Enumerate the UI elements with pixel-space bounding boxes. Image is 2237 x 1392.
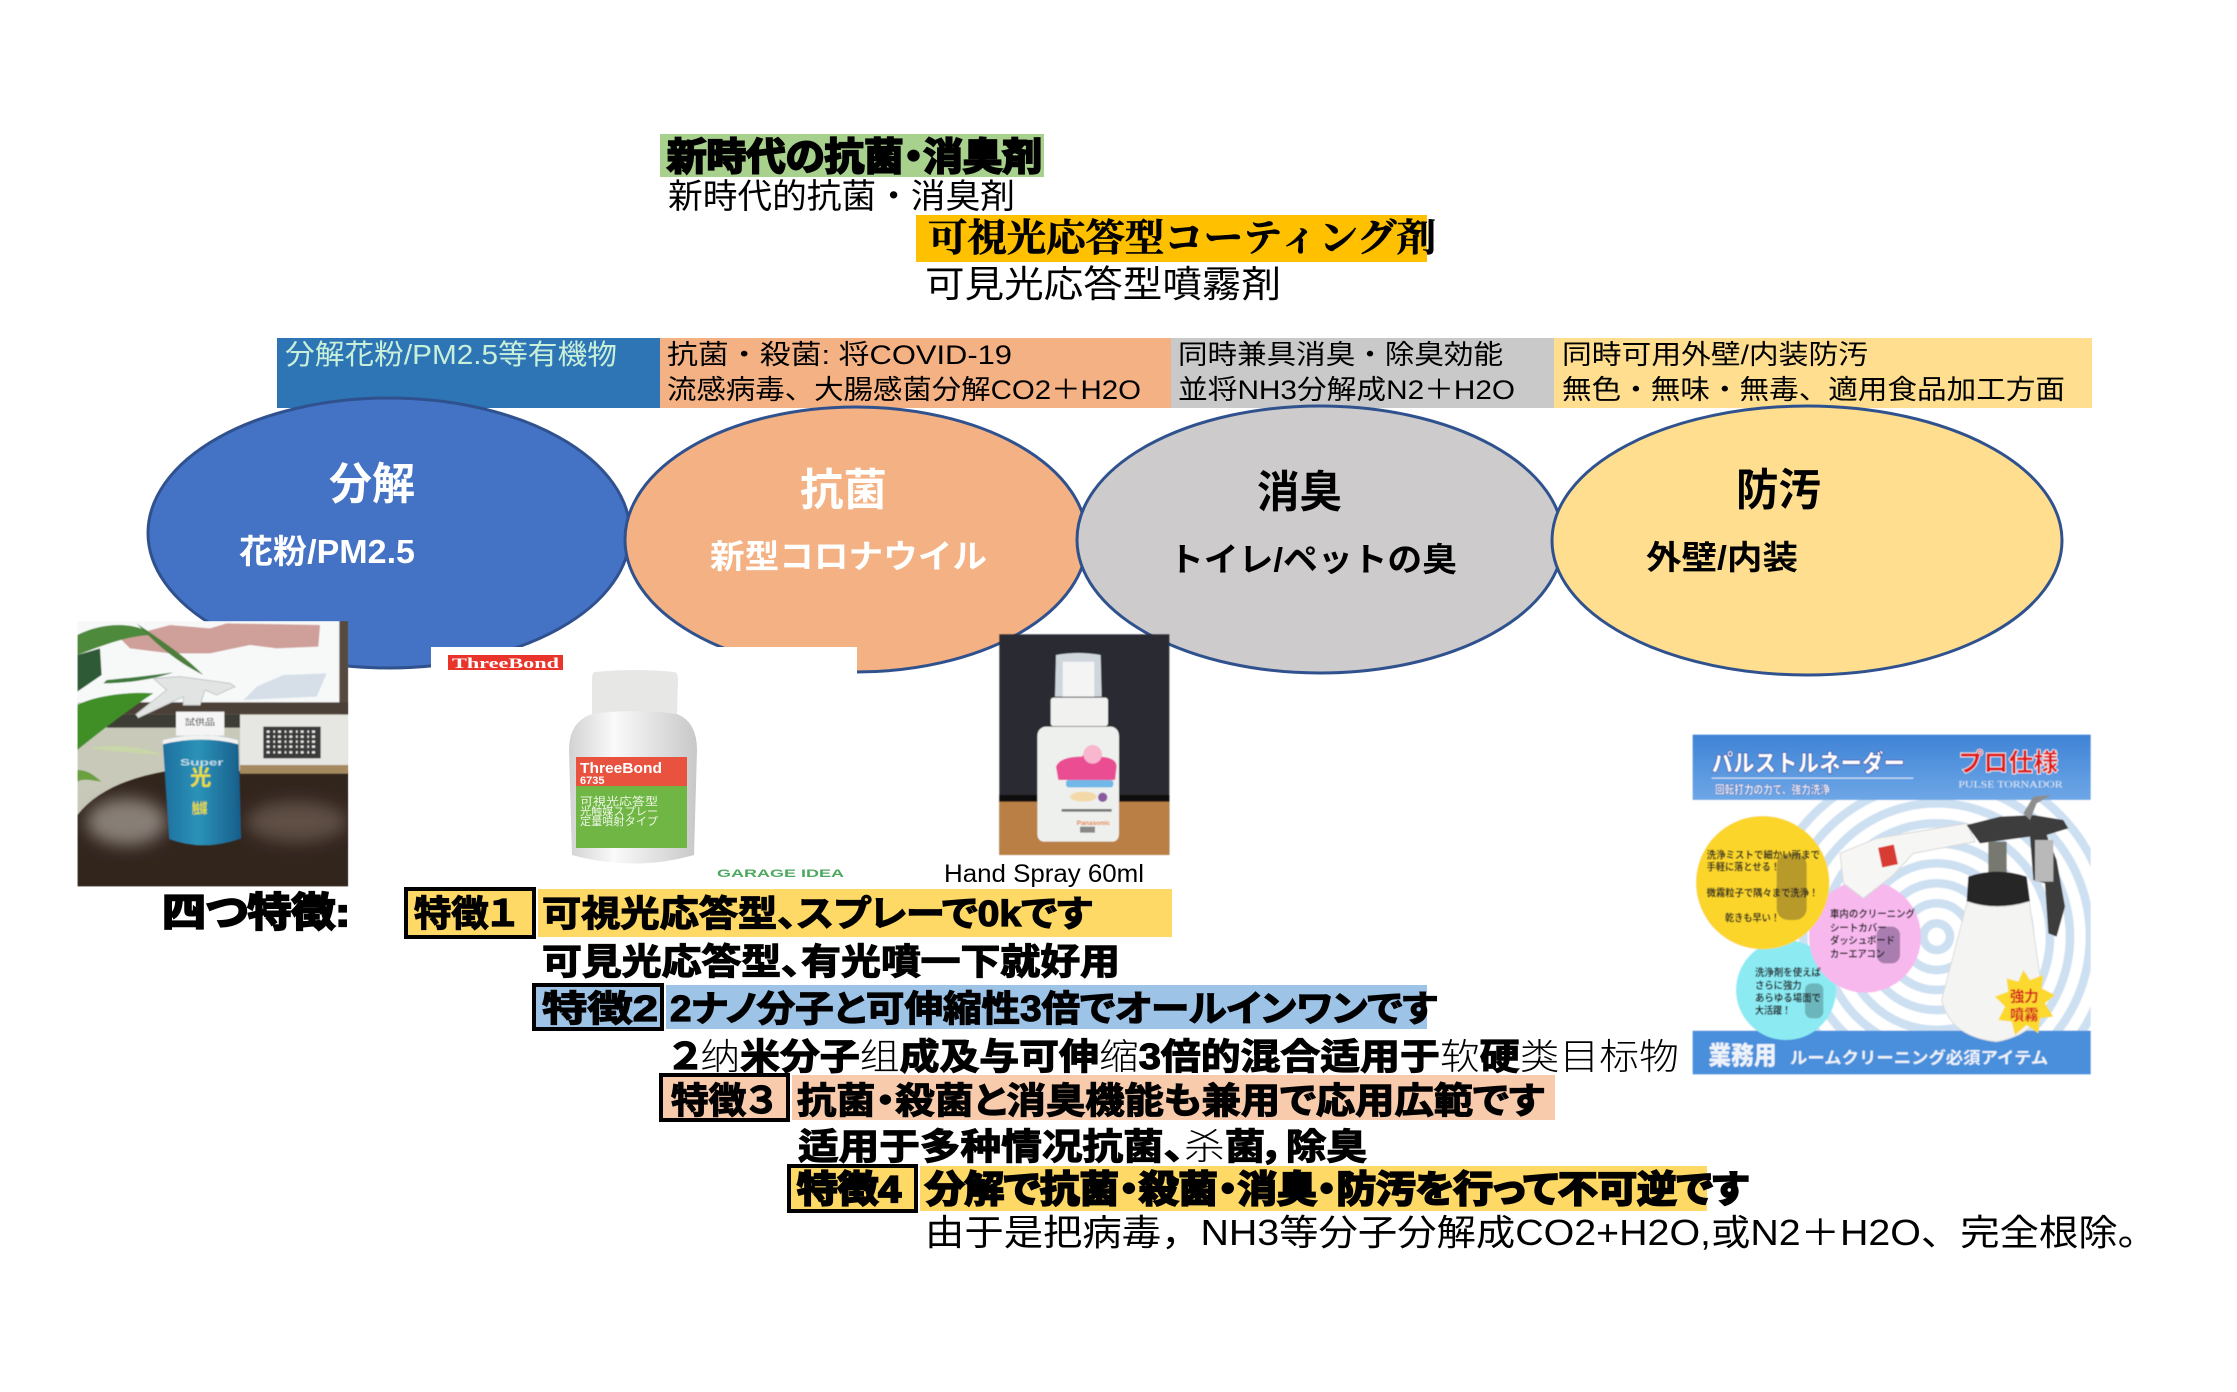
panel: antibacterial description strip: 抗菌・殺菌: 将COVID-19 xyxy=(667,340,1012,370)
circle text: ダッシュボード xyxy=(1830,934,1895,947)
feature 2: 特徴2 xyxy=(542,988,658,1029)
circle text: あらゆる場面で xyxy=(1755,993,1821,1005)
ellipse: antifouling xyxy=(1552,406,2062,675)
panel: decomposition description strip: 分解花粉/PM2.5等有機物 xyxy=(285,339,617,370)
concentric rings background xyxy=(1798,799,2091,1032)
panel: antibacterial description strip: 流感病毒、大腸感菌分解CO2＋H2O xyxy=(667,375,1141,405)
circle text: シートカバー xyxy=(1830,923,1887,935)
feature 1 xyxy=(406,889,1172,937)
circle text: 微霧粒子で隅々まで洗浄！ xyxy=(1707,887,1818,900)
ellipse: decomposition: 花粉/PM2.5 xyxy=(239,533,415,570)
panel: antifouling description strip: 同時可用外壁/内装防汚 xyxy=(1562,340,1868,370)
feature 2: 2ナノ分子と可伸縮性3倍でオールインワンです xyxy=(670,988,1437,1029)
panel: antifouling description strip: 無色・無味・無毒、適用食品加工方面 xyxy=(1562,375,2065,405)
feature 1: 可視光応答型、スプレーで0kです xyxy=(542,893,1092,934)
icon: ThreeBond spray can xyxy=(569,670,697,864)
photo: Pulse Tornador advert: プロ仕様 xyxy=(1958,750,2059,778)
panel: deodorant description strip: 同時兼具消臭・除臭効能 xyxy=(1178,340,1503,370)
photo: hand spray bottle xyxy=(999,634,1169,855)
ellipse: deodorant xyxy=(1077,406,1563,673)
ellipse: antibacterial: 新型コロナウイル xyxy=(710,538,987,575)
photo: Pulse Tornador advert: 強力 xyxy=(2010,989,2039,1006)
subtitle: Chinese title: 新時代的抗菌・消臭剤 xyxy=(668,178,1015,216)
circle text: 洗浄ミストで細かい所まで xyxy=(1707,848,1820,861)
circle text: カーエアコン xyxy=(1830,948,1885,960)
logo: ThreeBond xyxy=(448,655,563,672)
icon: ThreeBond spray can: 光触媒スプレー xyxy=(580,804,658,818)
ellipse: antibacterial: 抗菌 xyxy=(800,466,887,515)
ellipse: decomposition: 分解 xyxy=(329,460,415,509)
icon: ThreeBond spray can: 定量噴射タイプ xyxy=(580,814,658,828)
ellipse: antibacterial xyxy=(625,407,1087,672)
photo: Pulse Tornador advert: 噴霧 xyxy=(2010,1006,2039,1024)
caption: Hand Spray 60ml: Hand Spray 60ml xyxy=(944,860,1144,888)
circle text: さらに強力 xyxy=(1755,979,1802,992)
icon: ThreeBond spray can: ThreeBond xyxy=(580,760,662,777)
feature 3 xyxy=(661,1075,1555,1121)
photo: Pulse Tornador advert: 回転打力の力で、強力洗浄 xyxy=(1715,782,1831,796)
circle text: 手軽に落とせる！ xyxy=(1707,861,1780,874)
photo: Pulse Tornador advert xyxy=(1692,734,2092,1076)
feature 4 Chinese description: 由于是把病毒，NH3等分子分解成CO2+H2O,或N2＋H2O、完全根除。 xyxy=(925,1212,2157,1253)
circle text: 乾きも早い！ xyxy=(1725,912,1780,925)
feature 3 Chinese description: 适用于多种情况抗菌、 杀菌，除臭 xyxy=(798,1126,1367,1167)
circle text: 車内のクリーニング xyxy=(1830,907,1915,920)
subheading: visible-light spray: 可見光応答型噴霧剤 xyxy=(925,264,1281,305)
photo: Pulse Tornador advert: PULSE TORNADOR xyxy=(1958,780,2064,790)
photo: ThreeBond product on white background xyxy=(431,647,857,887)
feature 4: 分解で抗菌・殺菌・消臭・防汚を行って不可逆です xyxy=(925,1169,1748,1210)
icon: ThreeBond spray can: 6735 xyxy=(580,775,604,787)
panel: deodorant description strip: 並将NH3分解成N2＋H2O xyxy=(1178,375,1515,405)
photo: Pulse Tornador advert: ルームクリーニング必須アイテム xyxy=(1790,1047,2048,1067)
ellipse: deodorant: トイレ/ペットの臭 xyxy=(1169,541,1457,578)
photo: Super spray bottle on table: 触媒 xyxy=(192,800,207,816)
feature 3: 特徴３ xyxy=(671,1080,775,1121)
feature 1: 特徴１ xyxy=(414,893,517,934)
ellipse: decomposition xyxy=(148,398,630,668)
photo: hand spray bottle: Panasonic xyxy=(1077,820,1110,827)
panel: antibacterial description strip xyxy=(660,338,1171,408)
panel: antifouling description strip xyxy=(1554,338,2092,408)
photo: Super spray bottle on table xyxy=(77,621,348,887)
title: new-era antibacterial and deodorant: 新時代の抗菌・消臭剤 xyxy=(667,137,1042,179)
heading: visible-light coating agent: 可視光応答型コーティング剤 xyxy=(928,218,1436,260)
photo: Super spray bottle on table: 光 xyxy=(190,766,211,790)
ellipse: antifouling: 外壁/内装 xyxy=(1646,539,1798,576)
ellipse: antifouling: 防汚 xyxy=(1736,466,1821,515)
ellipse: deodorant: 消臭 xyxy=(1257,468,1342,517)
feature 2 Chinese description: ２纳米分子 组成及与可伸 缩3倍的混合适用于 软硬类目标物 xyxy=(670,1036,1679,1077)
label: GARAGE IDEA: GARAGE IDEA xyxy=(717,868,844,880)
badge star xyxy=(1995,970,2055,1035)
feature 4: 特徴4 xyxy=(797,1169,901,1210)
heading: four features: 四つ特徴: xyxy=(162,891,350,935)
circle text: 洗浄剤を使えば xyxy=(1755,966,1821,979)
icon: ThreeBond spray can: 可視光応答型 xyxy=(580,794,658,808)
photo: Super spray bottle on table: 試供品 xyxy=(185,716,215,727)
panel: decomposition description strip xyxy=(277,338,660,408)
logo: ThreeBond: ThreeBond xyxy=(452,656,560,672)
circle text xyxy=(1707,848,1915,1017)
banner text: パルストルネーダー xyxy=(1712,750,1905,778)
photo: Pulse Tornador advert: 業務用 xyxy=(1708,1042,1777,1070)
feature 1 Chinese description: 可見光応答型、有光噴一下就好用 xyxy=(542,941,1120,982)
photo: Super spray bottle on table: Super xyxy=(180,758,224,768)
circle text: 大活躍！ xyxy=(1755,1004,1791,1017)
panel: deodorant description strip xyxy=(1171,338,1554,408)
spray gun xyxy=(1840,823,1975,898)
feature 3: 抗菌・殺菌と消臭機能も兼用で応用広範です xyxy=(797,1080,1544,1121)
